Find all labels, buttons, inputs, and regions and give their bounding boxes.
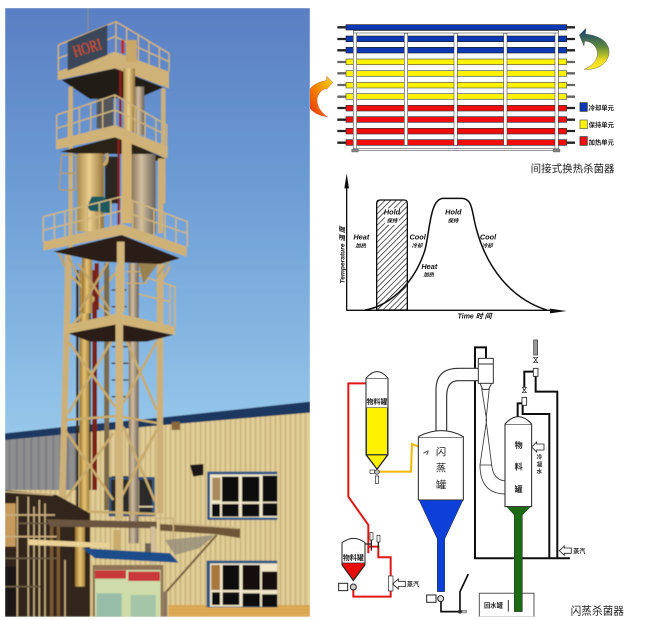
- window upper: [207, 472, 277, 520]
- chart labels: Time 时 间: [458, 312, 493, 320]
- side ladder: [59, 155, 77, 190]
- axes: [344, 173, 567, 313]
- cooling water arrow and label: 冷: [536, 453, 542, 461]
- arrow: heating crescent: [310, 76, 333, 117]
- foreground process equipment: [5, 490, 240, 617]
- diagram: flash sterilizer: [339, 340, 624, 618]
- cooling water arrow and label: 水: [536, 468, 542, 476]
- black steam and vacuum piping: [475, 347, 570, 558]
- yellow feed tank: [366, 372, 388, 483]
- red feed tank: 物料罐: [343, 553, 364, 562]
- flash tank: [418, 431, 463, 592]
- caption: flash sterilizer: 闪蒸杀菌器: [571, 605, 624, 618]
- sign canopy: [83, 548, 179, 563]
- window lower: [207, 561, 277, 607]
- discharge valve and pipe: [427, 574, 468, 614]
- condenser tank: 料: [515, 461, 523, 471]
- pump: [87, 197, 112, 213]
- tower upper structure: [43, 22, 187, 313]
- chart labels: Hold: [384, 208, 401, 217]
- blue cooling tubes: [346, 25, 567, 53]
- flash tank: 罐: [436, 479, 446, 492]
- chart labels: 保持: [448, 218, 459, 225]
- red feed piping: [348, 383, 391, 597]
- white frame: [353, 31, 558, 150]
- chart labels: Heat: [353, 233, 370, 242]
- antenna: [87, 8, 89, 31]
- vessels: [77, 153, 104, 232]
- condenser tank: [505, 417, 532, 612]
- photo: sterilization tower and factory building: [5, 8, 310, 617]
- chart labels: 冷却: [412, 242, 424, 249]
- legs below platform three: [68, 255, 160, 310]
- vapor duct: [436, 368, 479, 431]
- flash tank: 蒸: [436, 462, 446, 474]
- chart labels: Temperature 温 度: [338, 225, 346, 284]
- chart labels: [338, 208, 497, 320]
- cooling water arrow and label: 凝: [536, 460, 542, 468]
- factory building: [5, 402, 310, 617]
- caption: indirect sterilizer: 间接式换热杀菌器: [531, 162, 615, 175]
- legend: 冷却单元: [589, 103, 615, 112]
- return water tank: 回水罐: [484, 601, 504, 610]
- platform one: [58, 22, 169, 99]
- steam arrow on main pipe: 蒸汽: [573, 547, 585, 555]
- legend: 加热单元: [589, 137, 615, 146]
- condenser tank: 物: [515, 440, 523, 450]
- upper columns: [71, 87, 163, 255]
- legend: 保持单元: [589, 120, 615, 129]
- yellow feed tank: 物料罐: [367, 397, 387, 406]
- chart labels: 加热: [355, 242, 367, 249]
- ejector venturi: [480, 388, 505, 494]
- hatched hold bar: [377, 200, 407, 310]
- sky: [5, 8, 310, 438]
- chart labels: Hold: [445, 208, 462, 217]
- chart: temperature over time: [338, 173, 567, 320]
- chart labels: 加热: [423, 272, 435, 279]
- yellow holding tubes: [346, 59, 567, 99]
- exchanger stub connectors: [337, 27, 575, 143]
- chart labels: Cool: [480, 232, 497, 241]
- platform three: [43, 197, 187, 264]
- return water tank: [479, 593, 534, 617]
- cooling water arrow and label: [532, 442, 544, 476]
- temperature curve: [365, 198, 547, 310]
- red feed tank: [339, 533, 393, 591]
- chart labels: Cool: [410, 233, 427, 242]
- condenser tank: 罐: [515, 484, 523, 494]
- chart labels: 保持: [387, 218, 398, 225]
- gauge and valves: [522, 340, 538, 405]
- diagram: indirect heat exchange sterilizer: [306, 25, 615, 175]
- steam inlet arrow and label: [393, 579, 419, 589]
- red heating tubes: [346, 105, 567, 145]
- information board: [93, 565, 163, 617]
- flash tank: 闪: [436, 446, 446, 459]
- arrow: cooling crescent: [579, 28, 609, 70]
- HORI sign: HORI: [70, 34, 104, 61]
- steam arrow on main pipe: [559, 546, 585, 555]
- wall lamp: [190, 464, 203, 477]
- platform two: [56, 95, 168, 163]
- yellow feed pipe: [378, 444, 428, 472]
- tower lower structure: [62, 267, 170, 587]
- platform four: [66, 267, 175, 520]
- chart labels: 冷却: [482, 242, 494, 249]
- legend: [580, 103, 615, 146]
- chart labels: Heat: [421, 262, 438, 271]
- steam inlet arrow and label: 蒸汽: [407, 581, 419, 589]
